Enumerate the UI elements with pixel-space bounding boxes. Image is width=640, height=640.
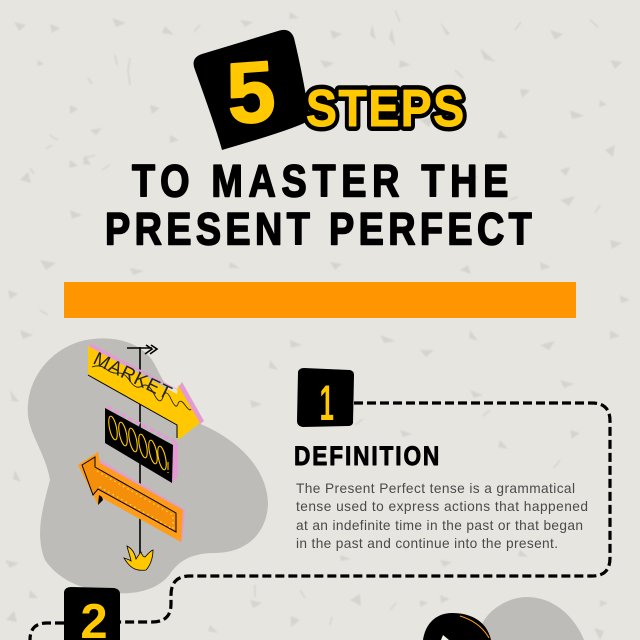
market arrow sign: MARKET (90, 349, 175, 404)
title: 5 badge (194, 30, 310, 150)
title: 5 badge: 5 (224, 44, 278, 143)
title: to master the present perfect: PRESENT PERFECT (105, 203, 532, 254)
title: to master the present perfect: TO MASTER THE (132, 155, 508, 206)
title: STEPS: STEPS (306, 80, 466, 138)
signpost pole (127, 345, 157, 556)
text block: definition: in the past and continue into the present. (296, 536, 558, 551)
step 1 number badge: 1 (320, 376, 334, 431)
orange divider bar (64, 282, 576, 318)
text block: definition: The Present Perfect tense is a grammatical (296, 481, 575, 496)
heading: definition: DEFINITION (294, 441, 439, 471)
icon: play button (423, 613, 491, 640)
flame (124, 546, 153, 570)
orange arrow sign (78, 452, 185, 543)
title: to master the present perfect (105, 155, 532, 254)
illustration: market signpost (78, 343, 204, 570)
step 2 number badge (64, 587, 120, 640)
panel: step 1 illustration blob (28, 338, 268, 593)
step 1 number badge (297, 368, 354, 431)
title: STEPS: STEPS (306, 80, 466, 138)
dashed connector path (30, 403, 610, 640)
text block: definition: at an indefinite time in the past or that began (296, 518, 583, 533)
black neon sign (105, 407, 178, 483)
market arrow sign (88, 343, 204, 440)
panel: step 2 illustration blob (478, 597, 584, 640)
text block: definition: tense used to express actions that happened (296, 499, 588, 514)
text block: definition (296, 481, 588, 551)
